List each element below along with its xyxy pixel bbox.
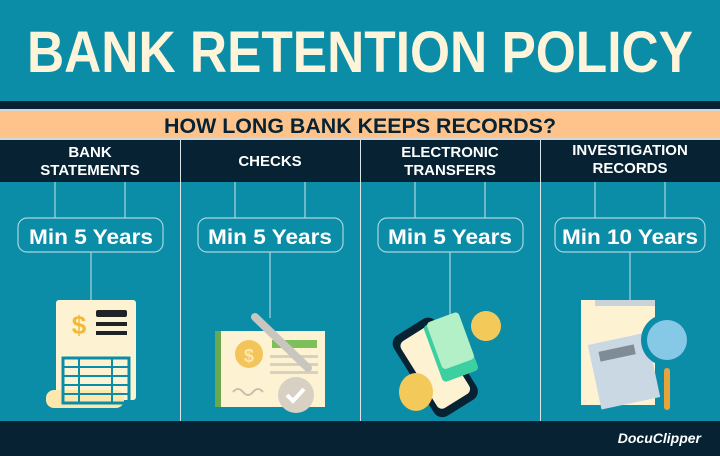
durations: Min 5 Years: [208, 226, 332, 249]
logo: DocuClipper: [618, 430, 703, 446]
pills and connectors: [18, 182, 705, 320]
durations: Min 5 Years: [29, 226, 153, 249]
durations: Min 5 Years: [388, 226, 512, 249]
footer: [0, 421, 720, 456]
header row: RECORDS: [592, 160, 668, 177]
icon: check: [215, 317, 325, 413]
icon: check: $: [244, 346, 254, 366]
header row: INVESTIGATION: [572, 142, 688, 159]
header row: CHECKS: [238, 153, 302, 170]
header row: BANK: [68, 144, 112, 161]
header row: ELECTRONIC: [401, 144, 499, 161]
header row: TRANSFERS: [404, 162, 496, 179]
icon: bank statement: [46, 300, 136, 408]
header row: STATEMENTS: [40, 162, 140, 179]
column dividers: [180, 140, 540, 421]
subtitle band: [0, 111, 720, 138]
icon: electronic transfer: [389, 311, 501, 421]
durations: [29, 226, 698, 249]
header row: [0, 140, 720, 182]
durations: Min 10 Years: [562, 226, 698, 249]
subtitle band: HOW LONG BANK KEEPS RECORDS?: [164, 115, 556, 138]
icon: investigation records: [581, 300, 693, 410]
icon: bank statement: $: [72, 310, 87, 340]
